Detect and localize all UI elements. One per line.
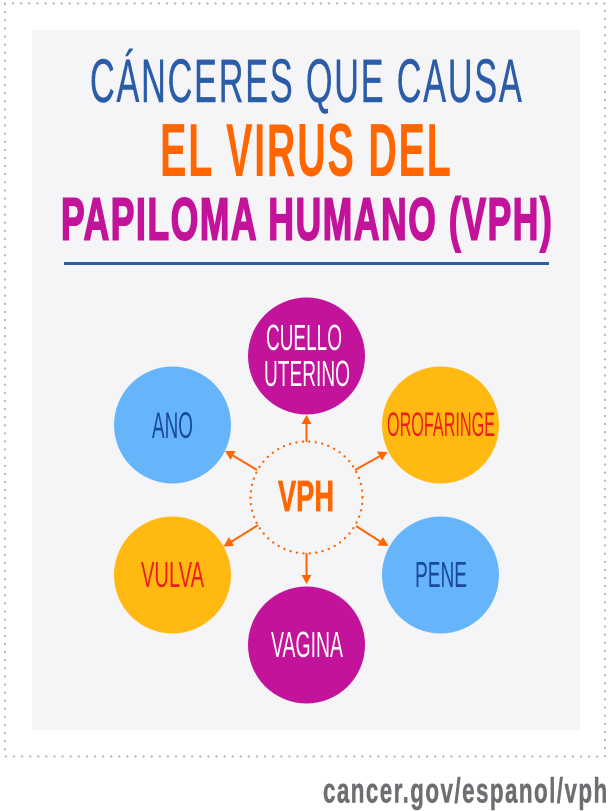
title underline [64,262,549,265]
circle: pene: PENE [415,554,467,595]
circle: cuello uterino: UTERINO [264,353,350,394]
circle: vagina: VAGINA [271,624,343,665]
center label VPH: VPH [278,472,334,521]
circle: vulva: VULVA [141,554,204,595]
circle: ano [114,366,231,484]
diagram: VPH and related cancers [114,298,499,704]
circle: vagina [248,586,365,704]
circle: cuello uterino: CUELLO [266,317,342,358]
circle: vulva [114,516,231,634]
title line 2: EL VIRUS DEL [160,109,451,192]
title [61,48,552,253]
arrow to ano [225,451,257,470]
center dotted circle [250,442,362,554]
circle: orofaringe: OROFARINGE [387,406,495,444]
arrow to vagina [302,553,312,584]
footer URL: cancer.gov/espanol/vph [323,772,607,811]
circle: cuello uterino [248,298,365,414]
arrow to orofaringe [355,452,388,470]
title line 3: PAPILOMA HUMANO (VPH) [61,187,552,253]
arrow to vulva [224,525,258,546]
circle: pene [382,516,499,634]
title line 1: CÁNCERES QUE CAUSA [90,48,522,116]
circle: ano: ANO [152,405,193,446]
arrow to cuello uterino [302,415,312,442]
circle: orofaringe [382,366,499,484]
arrow to pene [356,526,388,546]
panel: light grey background [32,30,580,730]
